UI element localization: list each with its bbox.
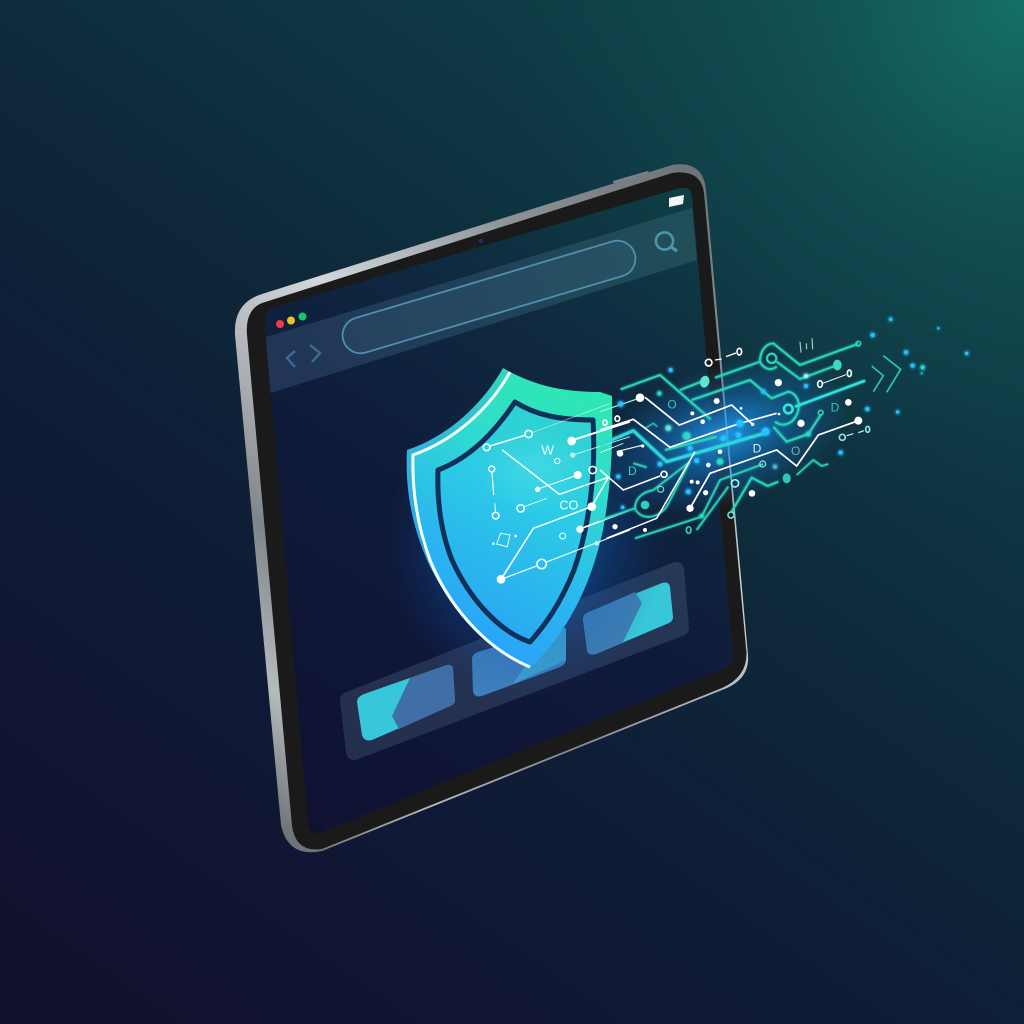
lower shield traces [497, 502, 630, 584]
tablet screen [265, 188, 733, 833]
tablet side button [613, 171, 650, 187]
button left [357, 665, 455, 740]
shield glyph labels [541, 442, 578, 513]
shield highlight [475, 425, 595, 515]
glowing blue particles [616, 318, 968, 518]
stream glyph labels: D [753, 442, 762, 456]
circuit glow [580, 328, 870, 542]
circuit stream [600, 318, 968, 538]
stream glyph labels: D [831, 401, 840, 415]
shield white rim line [413, 372, 530, 667]
button middle [472, 627, 566, 696]
stream glyph labels: D [628, 464, 637, 478]
browser toolbar [266, 195, 697, 393]
shield [407, 368, 612, 668]
tray panel [348, 570, 681, 752]
circuit traces on shield [483, 403, 630, 584]
window dots [276, 312, 306, 328]
stream glyph labels: O [667, 397, 677, 411]
address bar [338, 236, 640, 358]
circuit nodes and rings [603, 341, 870, 533]
button right [583, 582, 673, 654]
tablet black bezel [247, 172, 747, 850]
grey tick marks [800, 338, 813, 353]
battery icon [669, 195, 684, 207]
tablet metal frame [235, 164, 748, 852]
toolbar band [266, 208, 697, 393]
tablet device [235, 164, 748, 852]
front camera [479, 239, 483, 243]
shield glyph labels: CO [559, 499, 578, 513]
shield inner field [438, 402, 594, 642]
stream glyph labels: O [791, 444, 800, 458]
shield front face [413, 372, 612, 668]
search icon [656, 232, 677, 251]
white traces [600, 353, 864, 538]
stream glyph labels [628, 397, 840, 478]
centre shield traces [489, 450, 608, 519]
back and forward arrows [287, 345, 320, 367]
square chip glyph [492, 533, 517, 547]
blue glow behind shield [385, 390, 665, 700]
shield side extrusion [407, 368, 530, 668]
upper shield traces [483, 403, 630, 474]
white dots [612, 379, 862, 532]
shield glyph labels: W [541, 442, 554, 457]
chevrons [872, 356, 901, 392]
teal traces [600, 343, 865, 538]
bottom button tray [348, 570, 681, 752]
